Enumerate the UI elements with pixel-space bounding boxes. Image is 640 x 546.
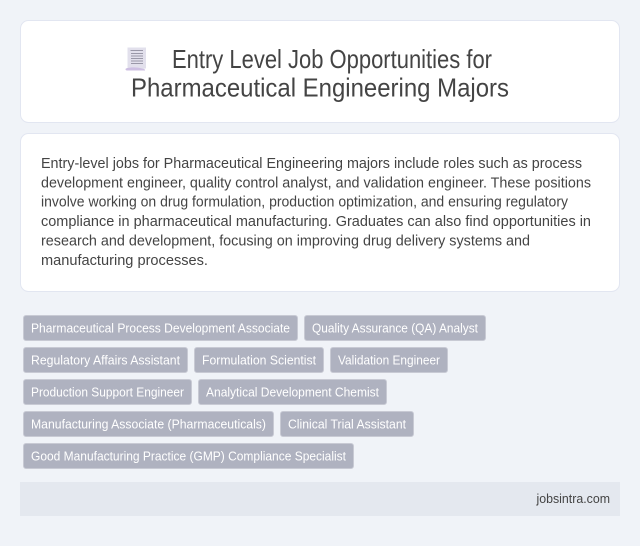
title: Entry Level Job Opportunities for xyxy=(172,44,492,74)
tag: Analytical Development Chemist: Analytical Development Chemist xyxy=(206,384,379,400)
tag: Clinical Trial Assistant xyxy=(280,412,414,436)
title: Pharmaceutical Engineering Majors xyxy=(131,72,509,102)
tag: Clinical Trial Assistant: Clinical Trial Assistant xyxy=(288,416,406,432)
tag: Regulatory Affairs Assistant xyxy=(24,348,188,372)
tag: Quality Assurance (QA) Analyst: Quality Assurance (QA) Analyst xyxy=(312,320,478,336)
tag: Formulation Scientist: Formulation Scientist xyxy=(202,352,316,368)
tag: Formulation Scientist xyxy=(194,348,324,372)
tag: Good Manufacturing Practice (GMP) Compliance Specialist: Good Manufacturing Practice (GMP) Compliance Specialist xyxy=(31,448,346,464)
tag: Good Manufacturing Practice (GMP) Compliance Specialist xyxy=(24,444,354,468)
tag: Pharmaceutical Process Development Associate xyxy=(24,316,298,340)
tag: Manufacturing Associate (Pharmaceuticals): Manufacturing Associate (Pharmaceuticals) xyxy=(31,416,266,432)
text block: description: research and development, focusing on improving drug delivery systems and xyxy=(41,232,530,250)
job tags xyxy=(24,316,486,468)
tag: Validation Engineer xyxy=(330,348,448,372)
text block: description: development engineer, quality control analyst, and validation engineer. These positions xyxy=(41,174,591,192)
tag: Regulatory Affairs Assistant: Regulatory Affairs Assistant xyxy=(31,352,180,368)
text block: description: Entry-level jobs for Pharmaceutical Engineering majors include roles such as process xyxy=(41,155,582,172)
panel: description xyxy=(20,134,620,292)
text block: description: involve working on drug formulation, production optimization, and ensuring regulatory xyxy=(41,194,568,210)
tag: Production Support Engineer: Production Support Engineer xyxy=(31,384,185,400)
text block: description: manufacturing processes. xyxy=(41,252,208,269)
footer text: jobsintra.com xyxy=(536,492,610,506)
panel: header xyxy=(20,20,620,122)
title xyxy=(131,44,509,102)
text block: description xyxy=(41,155,591,269)
tag: Validation Engineer: Validation Engineer xyxy=(338,352,441,368)
footer xyxy=(20,482,620,516)
icon: paper scroll document xyxy=(125,48,146,70)
tag: Production Support Engineer xyxy=(24,380,192,404)
tag: Pharmaceutical Process Development Associate: Pharmaceutical Process Development Associate xyxy=(31,320,290,336)
text block: description: compliance in pharmaceutical manufacturing. Graduates can also find opportunities in xyxy=(41,213,591,230)
tag: Analytical Development Chemist xyxy=(198,380,386,404)
tag: Manufacturing Associate (Pharmaceuticals) xyxy=(24,412,274,436)
tag: Quality Assurance (QA) Analyst xyxy=(304,316,486,340)
